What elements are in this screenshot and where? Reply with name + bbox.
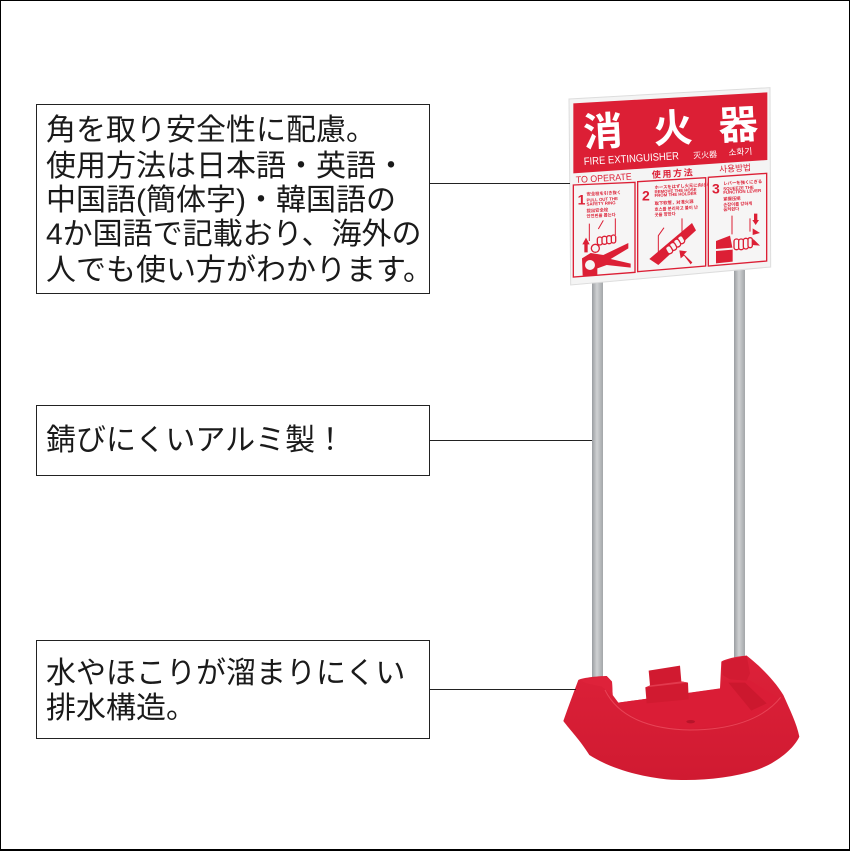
right post socket — [722, 656, 750, 681]
callout: sign description: 使用方法は日本語・英語・ — [46, 150, 406, 183]
instruction panel 3: FUNCTION LEVER — [723, 188, 762, 195]
pole: right — [734, 270, 745, 662]
instruction panel 2: 호스를 분리하고 불이 난 — [654, 204, 698, 213]
sign sub-headings — [576, 161, 751, 185]
instruction panel 2: ホースをはずし火元に向ける — [654, 181, 711, 191]
instruction panel 1: PULL OUT THE — [586, 196, 618, 203]
instruction panel 2: FROM THE HOLDER — [654, 191, 698, 198]
instruction panel 1: 安全栓を引き抜く — [586, 189, 621, 198]
left post socket — [580, 676, 613, 695]
sign header: 소화기 — [728, 145, 753, 159]
instruction panel 1: 拔出安全栓 — [586, 206, 609, 214]
base inner tray — [618, 681, 777, 729]
callout: aluminium — [36, 405, 430, 476]
red base — [563, 656, 799, 780]
callout: sign description: 中国語(簡体字)・韓国語の — [46, 184, 396, 217]
instruction panel 3: 손잡이를 강하게 — [723, 200, 752, 208]
instruction panel 3: 움켜쥔다 — [723, 205, 739, 213]
sign header — [573, 92, 767, 173]
instruction panel 2: 곳을 향한다 — [654, 210, 676, 218]
callout: sign description: 人でも使い方がわかります。 — [46, 254, 433, 287]
callout: sign description: 4か国語で記載おり、海外の — [46, 218, 421, 251]
pole: left — [592, 280, 603, 685]
instruction panel 3 — [708, 173, 767, 266]
instruction panel 1: 1 — [578, 191, 586, 207]
instruction panel 3: SQUEEZE THE — [723, 185, 754, 191]
instruction panel 2 — [638, 178, 711, 272]
instruction panel 3: レバーを強くにぎる — [723, 178, 762, 187]
instruction panel 1: SAFETY RING — [586, 200, 616, 207]
connector line: pole — [429, 440, 592, 441]
instruction panel 1 — [573, 182, 635, 277]
instruction panel 2: 取下软管，对准火源 — [654, 198, 694, 207]
base inner rim highlight — [605, 690, 781, 730]
connector line: base — [429, 689, 576, 690]
instruction panel 1: 안전핀을 뽑는다 — [586, 211, 616, 220]
instruction panel 2: REMOVE THE HOSE — [654, 187, 697, 194]
sign header: 消 — [582, 99, 624, 158]
sign sub-headings: TO OPERATE — [576, 172, 632, 185]
instruction panel 3: 紧握压把 — [723, 195, 741, 203]
callout: sign description — [36, 104, 430, 294]
drain hole — [686, 720, 695, 723]
sign sub-headings: 사용방법 — [719, 161, 751, 175]
connector line: sign — [429, 183, 570, 184]
sign header: FIRE EXTINGUISHER — [583, 150, 680, 168]
centre socket — [645, 666, 689, 703]
callout: aluminium: 錆びにくいアルミ製！ — [46, 424, 345, 457]
base outer shell — [563, 656, 799, 780]
sign header: 火 — [652, 96, 694, 155]
instruction panel 3: 3 — [712, 181, 720, 197]
callout: sign description: 角を取り安全性に配慮。 — [46, 114, 376, 147]
instruction panel 2: 2 — [642, 187, 650, 203]
sign header: 器 — [717, 93, 759, 152]
sign sub-headings: 使用方法 — [651, 165, 695, 181]
sign panel — [569, 88, 771, 285]
sign header: 灭火器 — [693, 149, 717, 161]
callout: drainage: 排水構造。 — [46, 692, 196, 725]
callout: drainage — [36, 640, 430, 739]
callout: drainage: 水やほこりが溜まりにくい — [46, 657, 405, 690]
